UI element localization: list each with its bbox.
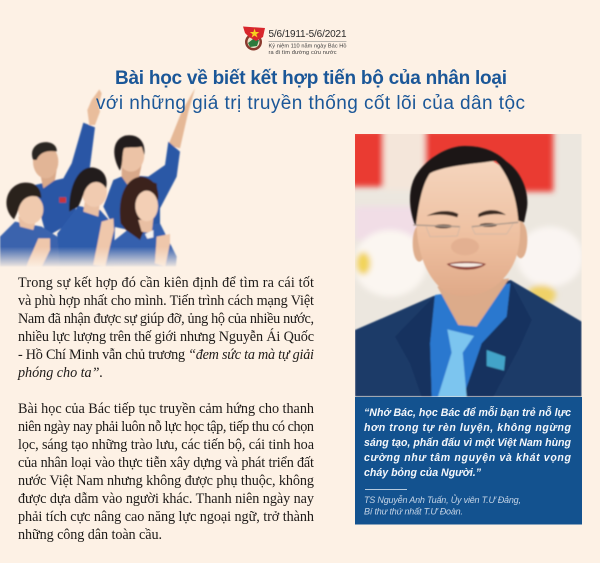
logo: youth union emblem [243,26,265,50]
paragraph 1: - Hồ Chí Minh vẫn chủ trương “đem sức ta mà tự giải [18,347,314,363]
quote text: sáng tạo, phấn đấu vì một Việt Nam hùng [364,437,572,449]
date heading: ra đi tìm đường cứu nước [268,50,337,56]
paragraph 2 [18,401,315,543]
woman at front right [110,177,177,267]
date heading: Kỷ niệm 110 năm ngày Bác Hồ [268,42,346,50]
people photo: group of youth union members [0,88,195,268]
paragraph 2: lọc, sáng tạo những trào lưu, các tiến bộ, cái tinh hoa [18,437,315,453]
paragraph 1: nhiều lực lượng trên thế giới nhưng Nguyễn Ái Quốc [18,328,314,345]
pin [487,350,505,371]
woman at front left [0,183,60,267]
paragraph 2: được dựa dẫm vào người khác. Thanh niên ngày nay [18,491,315,507]
tie [438,329,474,397]
paragraph 2: của nhân loại vào thực tiễn xây dựng và phát triển đất [18,455,314,471]
paragraph 1 [17,275,314,381]
paragraph 2: những công dân toàn cầu. [18,527,162,543]
date heading [268,29,347,56]
date heading: 5/6/1911-5/6/2021 [268,29,347,40]
paragraph 1: Trong sự kết hợp đó cần kiên định để tìm ra cái tốt [18,275,314,291]
man at back right [103,88,195,237]
quote text: “Nhớ Bác, học Bác để mỗi bạn trẻ nỗ lực [364,406,571,419]
glasses [413,222,518,227]
title: Bài học về biết kết hợp tiến bộ của nhân loại [115,68,507,89]
quote text: cường như tâm nguyện và khát vọng [364,452,572,464]
quote text: hơn trong tự rèn luyện, không ngừng [364,422,572,434]
attribution [364,494,521,516]
attribution: Bí thư thứ nhất T.Ư Đoàn. [364,506,463,516]
woman at front middle [57,167,115,267]
paragraph 2: niên ngày nay phải luôn nỗ lực học tập, tiếp thu có chọn [18,419,314,435]
quote box [355,397,582,524]
hair [410,146,527,225]
mouth [447,261,486,270]
suit [355,280,582,397]
attribution: TS Nguyễn Anh Tuấn, Ủy viên T.Ư Đảng, [364,494,521,505]
lapels [395,297,434,397]
man at back left [32,89,102,237]
quote text: cháy bỏng của Người.” [364,467,482,479]
paragraph 2: Bài học của Bác tiếp tục truyền cảm hứng cho thanh [18,401,314,417]
title [96,68,525,114]
portrait photo [350,130,583,397]
title: với những giá trị truyền thống cốt lõi của dân tộc [96,93,525,114]
shirt [430,283,511,397]
neck [437,278,509,327]
quote text [364,406,572,479]
ears and face [413,225,426,262]
eyebrows and eyes [427,211,458,217]
paragraph 2: nước Việt Nam nhưng không được phụ thuộc, không [18,473,314,489]
paragraph 1: và phù hợp nhất cho mình. Tiến trình cách mạng Việt [18,293,314,309]
paragraph 2: phải tích cực nâng cao năng lực ngoại ngữ, trở thành [18,509,314,525]
paragraph 1: Nam đã nhận được sự giúp đỡ, ủng hộ của nhiều nước, [18,311,314,327]
paragraph 1: phóng cho ta”. [17,365,103,381]
